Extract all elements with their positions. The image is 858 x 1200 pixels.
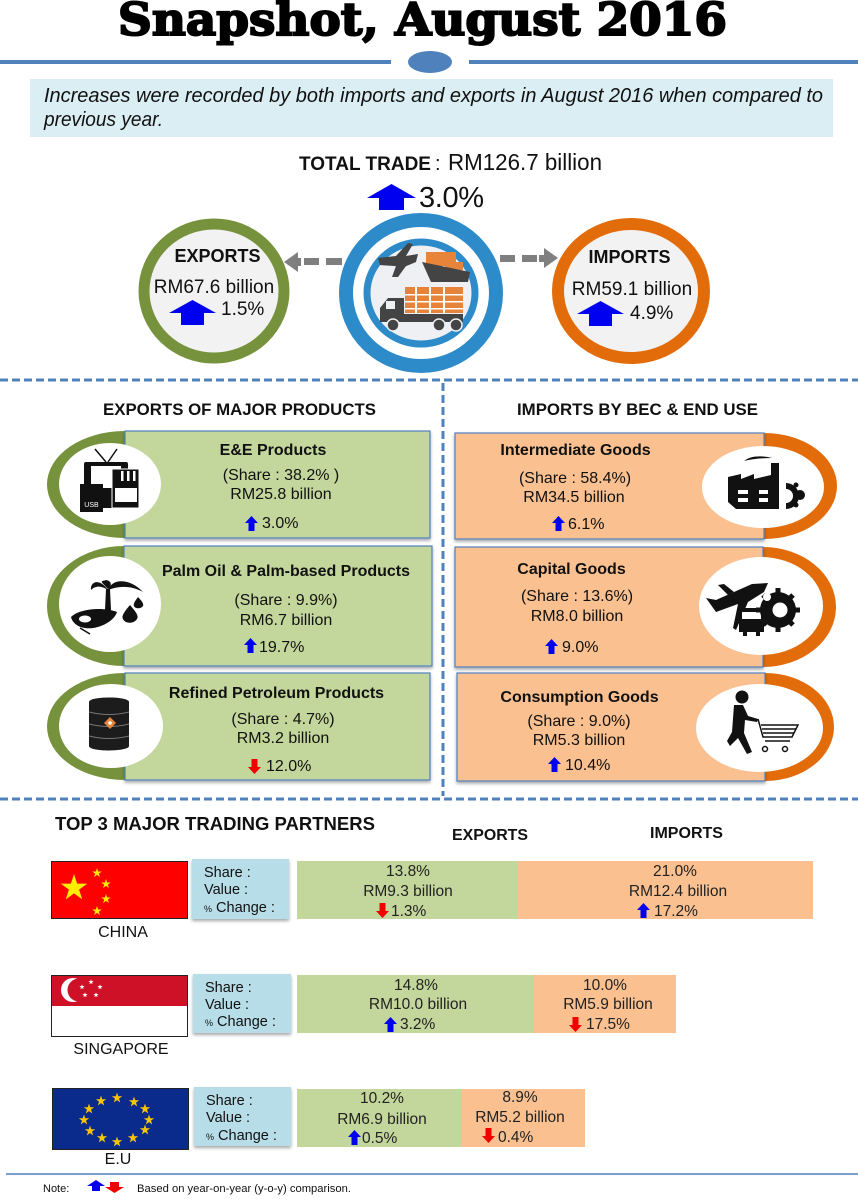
exports bar [297,861,518,920]
exports bar: 10.2% [360,1090,404,1107]
column heading: imports: IMPORTS [650,825,723,842]
imports bar [518,861,813,920]
panel: consumption goods: 10.4% [565,757,610,774]
imports bar: RM12.4 billion [629,883,727,900]
heading: top 3 major trading partners: TOP 3 MAJOR TRADING PARTNERS [55,814,375,834]
footnote [43,1180,351,1195]
panel: capital goods: Capital Goods [517,561,626,578]
imports circle: RM59.1 billion [572,279,692,300]
panel: E&E products: RM25.8 billion [230,486,332,503]
row labels [193,974,291,1033]
panel: refined petroleum products: 12.0% [266,758,311,775]
exports bar: RM10.0 billion [369,996,467,1013]
partner row: Singapore: SINGAPORE [73,1041,169,1058]
partner row: China [52,859,813,941]
exports bar: 3.2% [400,1016,436,1033]
panel: E&E products: E&E Products [220,442,326,459]
exports circle: 1.5% [221,299,264,320]
partner row: E.U: E.U [105,1151,131,1168]
exports bar [297,975,534,1033]
row labels: % Change : [206,1128,277,1144]
icon: electronics: USB [84,502,99,509]
panel: palm oil products [47,546,432,666]
exports circle: RM67.6 billion [154,277,274,298]
imports bar: 10.0% [583,977,627,994]
arrow: to imports [500,248,558,268]
icon: electronics [80,449,139,512]
partner row: China: CHINA [98,924,148,941]
icon: factory [728,456,805,509]
row labels: Value : [204,882,248,898]
panel: consumption goods: (Share : 9.0%) [527,713,631,730]
heading: exports of major products: EXPORTS OF MAJOR PRODUCTS [103,400,376,419]
footnote: Note: [43,1183,69,1195]
heading: imports by BEC and end use: IMPORTS BY BEC & END USE [517,400,758,419]
panel: capital goods [455,547,836,667]
panel: E&E products [47,431,430,538]
total trade change: 3.0% [419,182,484,214]
partner row: Singapore [52,974,676,1058]
total trade heading: TOTAL TRADE [299,154,431,175]
exports bar: 1.3% [391,903,427,920]
total trade heading [299,149,602,175]
panel: palm oil products: RM6.7 billion [240,612,332,629]
icon: palm and oil [71,580,143,634]
icon: truck [380,287,463,331]
exports circle [144,224,284,358]
icon: plane, bus and gear [706,583,800,636]
panel: palm oil products: 19.7% [259,639,304,656]
imports circle: IMPORTS [588,247,671,267]
row labels: Value : [206,1110,250,1126]
center trade circle [346,220,496,366]
total trade heading: RM126.7 billion [448,149,602,175]
imports bar: RM5.9 billion [563,996,653,1013]
panel: consumption goods: Consumption Goods [500,689,659,706]
exports bar: RM9.3 billion [363,883,453,900]
exports bar: 0.5% [362,1130,398,1147]
partner row: E.U [52,1087,585,1168]
imports bar: 8.9% [502,1089,538,1106]
imports bar: 0.4% [498,1129,534,1146]
panel: consumption goods [457,673,834,781]
exports bar: 14.8% [394,977,438,994]
exports bar: RM6.9 billion [337,1111,427,1128]
row labels: Share : [206,1093,253,1109]
panel: refined petroleum products [47,673,430,780]
column heading: exports: EXPORTS [452,827,528,844]
panel: refined petroleum products: RM3.2 billion [237,730,329,747]
imports bar: RM5.2 billion [475,1109,565,1126]
imports circle [558,224,704,358]
exports circle: EXPORTS [174,246,261,266]
panel: refined petroleum products: (Share : 4.7%) [231,711,335,728]
title divider [0,51,858,73]
imports bar [461,1089,585,1147]
panel: E&E products: (Share : 38.2% ) [223,467,339,484]
row labels: % Change : [205,1014,276,1030]
imports bar: 21.0% [653,863,697,880]
arrow: to exports [284,252,342,272]
row labels: % Change : [204,900,275,916]
panel: E&E products: 3.0% [262,515,298,532]
icon: plane [378,243,418,277]
panel: intermediate goods [455,433,837,539]
footnote: Based on year-on-year (y-o-y) comparison. [137,1183,351,1195]
section dividers [0,380,858,799]
exports bar [297,1089,461,1147]
panel: palm oil products: (Share : 9.9%) [234,592,338,609]
footer rule [6,1173,858,1175]
row labels: Share : [205,980,252,996]
panel: palm oil products: Palm Oil & Palm-based Products [162,563,410,580]
exports bar: 13.8% [386,863,430,880]
panel: refined petroleum products: Refined Petroleum Products [169,685,384,702]
intro text block [30,79,833,137]
icon: ship [422,252,470,282]
row labels: Value : [205,997,249,1013]
flag: E.U [52,1088,188,1150]
panel: consumption goods: RM5.3 billion [533,732,625,749]
panel: intermediate goods: Intermediate Goods [500,442,651,459]
imports bar: 17.2% [654,903,698,920]
total trade heading: : [435,153,441,175]
panel: intermediate goods: RM34.5 billion [523,489,625,506]
panel: capital goods: (Share : 13.6%) [521,588,633,605]
panel: capital goods: 9.0% [562,639,598,656]
flag: China [52,862,188,918]
flag: Singapore [52,976,188,1036]
row labels: Share : [204,865,251,881]
imports circle: 4.9% [630,303,673,324]
panel: intermediate goods: 6.1% [568,516,604,533]
total trade change [367,182,484,214]
imports bar: 17.5% [586,1016,630,1033]
intro text block: previous year. [43,109,163,131]
row labels [194,1087,291,1146]
icon: oil barrel [89,698,129,750]
imports bar [534,975,676,1033]
panel: intermediate goods: (Share : 58.4%) [519,470,631,487]
panel: capital goods: RM8.0 billion [531,608,623,625]
intro text block: Increases were recorded by both imports and exports in August 2016 when compared to [44,85,823,107]
row labels [192,859,289,919]
icon: person with trolley [727,690,798,754]
